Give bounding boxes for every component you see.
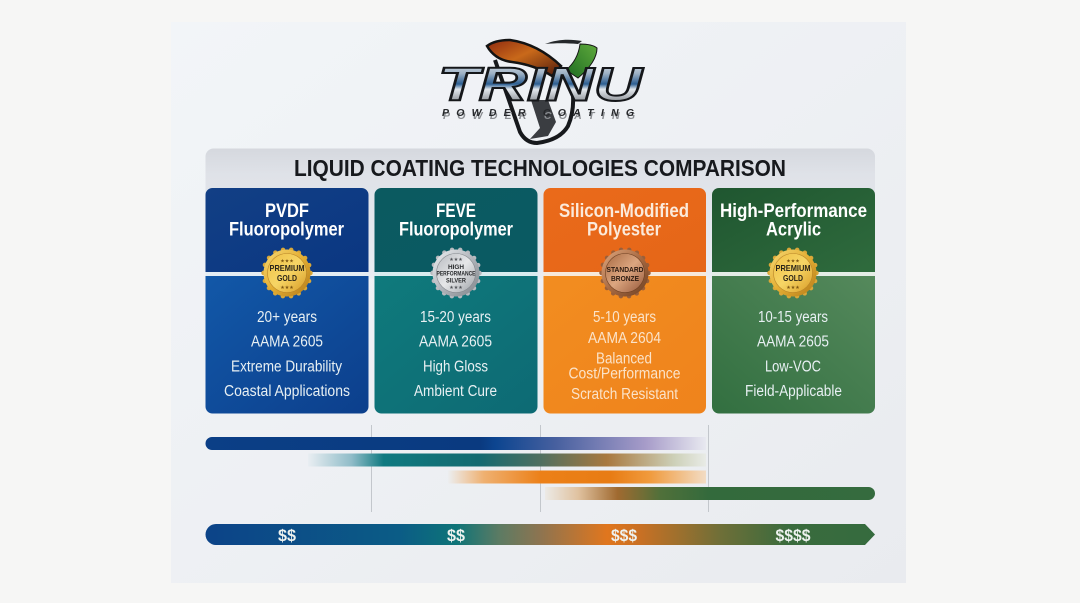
specs: Low-VOC — [765, 358, 821, 376]
cost arrow — [206, 524, 875, 545]
cost label: PVDF: $$ — [278, 526, 297, 545]
heading: High-Performance — [720, 201, 867, 222]
badge: premium gold: GOLD — [277, 273, 297, 283]
badge: premium gold: PREMIUM — [270, 263, 304, 273]
panel: FEVE Fluoropolymer — [374, 188, 538, 414]
specs: High Gloss — [423, 358, 488, 376]
badge: standard bronze: BRONZE — [611, 274, 639, 283]
badge: premium gold — [770, 250, 816, 296]
specs: 10-15 years — [758, 309, 828, 326]
specs: Cost/Performance — [568, 366, 680, 382]
specs: Coastal Applications — [224, 383, 350, 400]
title panel — [206, 148, 875, 278]
panel: Silicon-Modified Polyester — [544, 188, 706, 414]
logo: Trinu Powder Coating — [438, 40, 644, 143]
bar: PVDF — [206, 437, 706, 450]
heading: PVDF — [265, 201, 309, 222]
bar: high-performance acrylic — [545, 487, 875, 500]
badge: premium gold: PREMIUM — [776, 263, 810, 273]
badge: premium gold — [264, 250, 310, 296]
heading — [559, 201, 689, 240]
specs: AAMA 2605 — [757, 334, 829, 350]
badge: standard bronze — [602, 250, 648, 296]
specs — [568, 309, 680, 403]
specs: AAMA 2605 — [419, 334, 492, 350]
heading: Polyester — [587, 220, 662, 240]
badge: premium gold: GOLD — [783, 273, 803, 283]
badge: high performance silver: ★★★ — [449, 285, 463, 291]
board panel — [171, 22, 906, 583]
badge: premium gold: ★★★ — [786, 285, 800, 291]
bar: silicon-modified polyester — [448, 470, 706, 484]
badge: standard bronze: STANDARD — [606, 265, 644, 274]
heading: Silicon-Modified — [559, 201, 689, 222]
specs — [224, 309, 350, 400]
badge: high performance silver: ★★★ — [449, 257, 463, 263]
badge: high performance silver: PERFORMANCE — [436, 272, 476, 278]
specs: Balanced — [596, 350, 652, 368]
specs: Ambient Cure — [414, 383, 497, 400]
badge: premium gold: ★★★ — [280, 258, 294, 264]
heading: FEVE — [436, 201, 476, 222]
logo ring swoosh — [487, 40, 597, 143]
logo wordmark: TRINU — [438, 58, 644, 110]
specs: Field-Applicable — [745, 383, 842, 400]
specs: 5-10 years — [593, 309, 656, 326]
badge: high performance silver: HIGH — [448, 265, 464, 271]
specs — [745, 309, 842, 400]
heading: Acrylic — [766, 220, 821, 240]
panel: High-Performance Acrylic — [712, 188, 875, 414]
title: LIQUID COATING TECHNOLOGIES COMPARISON — [294, 155, 786, 181]
cost label: polyester: $$$ — [611, 526, 637, 545]
panel: PVDF Fluoropolymer — [206, 188, 368, 414]
badge: high performance silver: SILVER — [446, 278, 467, 284]
badge: high performance silver — [432, 250, 480, 296]
heading — [720, 201, 867, 240]
logo tagline: POWDER COATING — [443, 110, 635, 122]
specs: 20+ years — [257, 309, 317, 326]
specs: 15-20 years — [420, 309, 491, 326]
heading — [399, 201, 514, 240]
heading: Fluoropolymer — [399, 220, 514, 240]
bar: FEVE — [308, 454, 706, 466]
badge: premium gold: ★★★ — [280, 285, 294, 291]
specs: Extreme Durability — [231, 358, 342, 376]
specs: AAMA 2605 — [251, 334, 323, 350]
heading: Fluoropolymer — [229, 220, 345, 240]
cost label: FEVE: $$ — [447, 526, 466, 545]
badge: premium gold: ★★★ — [786, 258, 800, 264]
logo tagline: POWDER COATING — [442, 107, 634, 119]
specs: Scratch Resistant — [571, 386, 679, 403]
cost label: acrylic: $$$$ — [776, 526, 811, 545]
specs: AAMA 2604 — [588, 330, 661, 347]
specs — [414, 309, 497, 400]
heading — [229, 201, 345, 240]
chart: lifespan range bars — [206, 425, 875, 512]
